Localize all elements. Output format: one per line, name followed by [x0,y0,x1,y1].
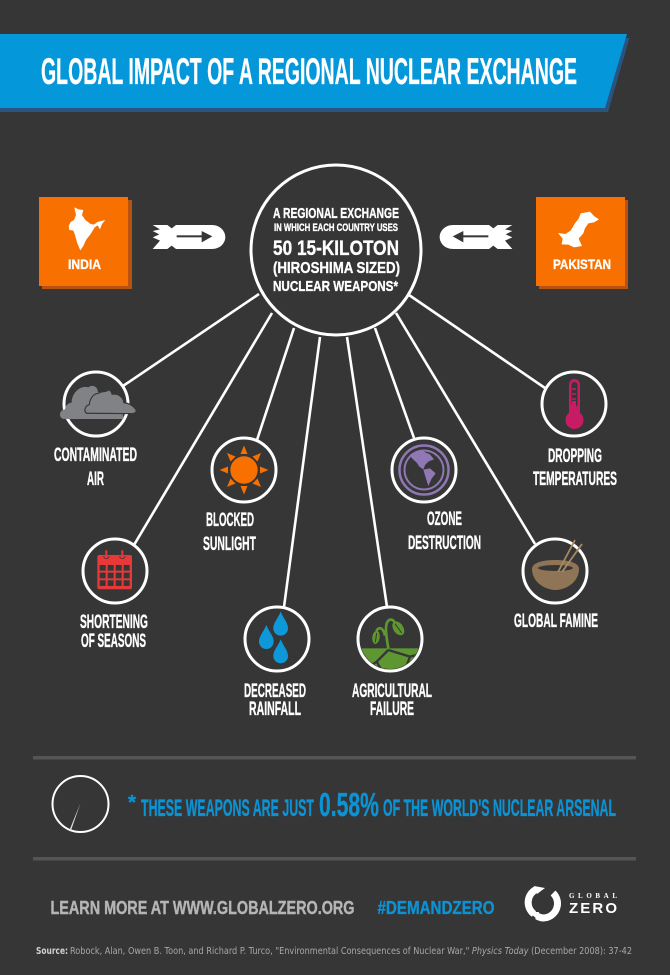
item: decreased rainfall [244,607,309,720]
icon: globe with rings [400,446,448,494]
logo: Global Zero: ZERO [569,900,617,917]
title banner [0,34,630,112]
callout: arsenal share: THESE WEAPONS ARE JUST [141,795,314,822]
label: decreased rainfall [244,681,306,720]
item: blocked sunlight [203,438,276,555]
icon: bomb pointing right [153,225,225,249]
pie: share of nuclear arsenal [52,776,108,832]
label: dropping temperatures: DROPPING [548,446,602,467]
icon: bomb pointing left [440,225,512,249]
panel: Pakistan [536,197,628,289]
icon: rain drops [259,612,288,663]
label: ozone destruction: DESTRUCTION [408,533,481,554]
central circle [251,165,421,335]
label: agricultural failure: FAILURE [370,699,414,720]
label: blocked sunlight: SUNLIGHT [203,534,256,555]
central text: A REGIONAL EXCHANGE [273,206,399,222]
label: Pakistan: PAKISTAN [553,256,611,272]
item: contaminated air [54,372,137,490]
label: dropping temperatures [533,446,617,490]
icon: thermometer [566,379,584,429]
item: ozone destruction [392,438,481,554]
label: decreased rainfall: RAINFALL [249,699,301,720]
callout: arsenal share: * [128,792,136,814]
source note: Source: [36,946,68,957]
icon: sun [220,446,268,494]
label: blocked sunlight: BLOCKED [206,510,254,531]
label: contaminated air: CONTAMINATED [54,445,137,466]
icon: clouds [60,386,136,419]
item: dropping temperatures [533,372,617,490]
icon: India map [69,207,105,250]
icon: Pakistan map [558,212,599,247]
label: blocked sunlight [203,510,256,555]
label: contaminated air [54,445,137,490]
callout: arsenal share [128,786,616,823]
label: global famine: GLOBAL FAMINE [514,611,598,632]
label: ozone destruction [408,509,481,554]
label: ozone destruction: OZONE [427,509,462,530]
item: agricultural failure [352,607,432,720]
label: agricultural failure [352,681,432,720]
source note: Robock, Alan, Owen B. Toon, and Richard P. Turco, "Environmental Consequences of Nuclear War," Physics Today (December 2008): 37-42 [70,946,632,957]
central text: (HIROSHIMA SIZED) [273,260,400,277]
callout: arsenal share: 0.58% [319,786,379,823]
label: agricultural failure: AGRICULTURAL [352,681,432,702]
divider bottom [33,857,636,860]
central text: NUCLEAR WEAPONS* [273,278,398,295]
icon: sprout on cracked ground [362,618,418,669]
item: shortening of seasons [80,539,148,652]
logo: Global Zero: GLOBAL [569,892,617,900]
icon: bowl with chopsticks [532,540,582,590]
central text [273,206,400,295]
icon: calendar [97,550,132,589]
central text: IN WHICH EACH COUNTRY USES [274,222,398,234]
label: India: INDIA [68,256,101,272]
logo: Global Zero [528,886,617,920]
label: shortening of seasons: OF SEASONS [81,631,146,652]
call to action: LEARN MORE AT WWW.GLOBALZERO.ORG [50,898,354,918]
label: decreased rainfall: DECREASED [244,681,306,702]
label: shortening of seasons: SHORTENING [80,612,148,633]
connector lines [123,294,545,607]
panel: India [39,197,132,289]
central text: 50 15-KILOTON [273,237,399,260]
label: shortening of seasons [80,612,148,652]
divider top [33,756,636,760]
hashtag: #DEMANDZERO [378,898,494,918]
item: global famine [514,539,598,632]
label: contaminated air: AIR [87,469,104,490]
